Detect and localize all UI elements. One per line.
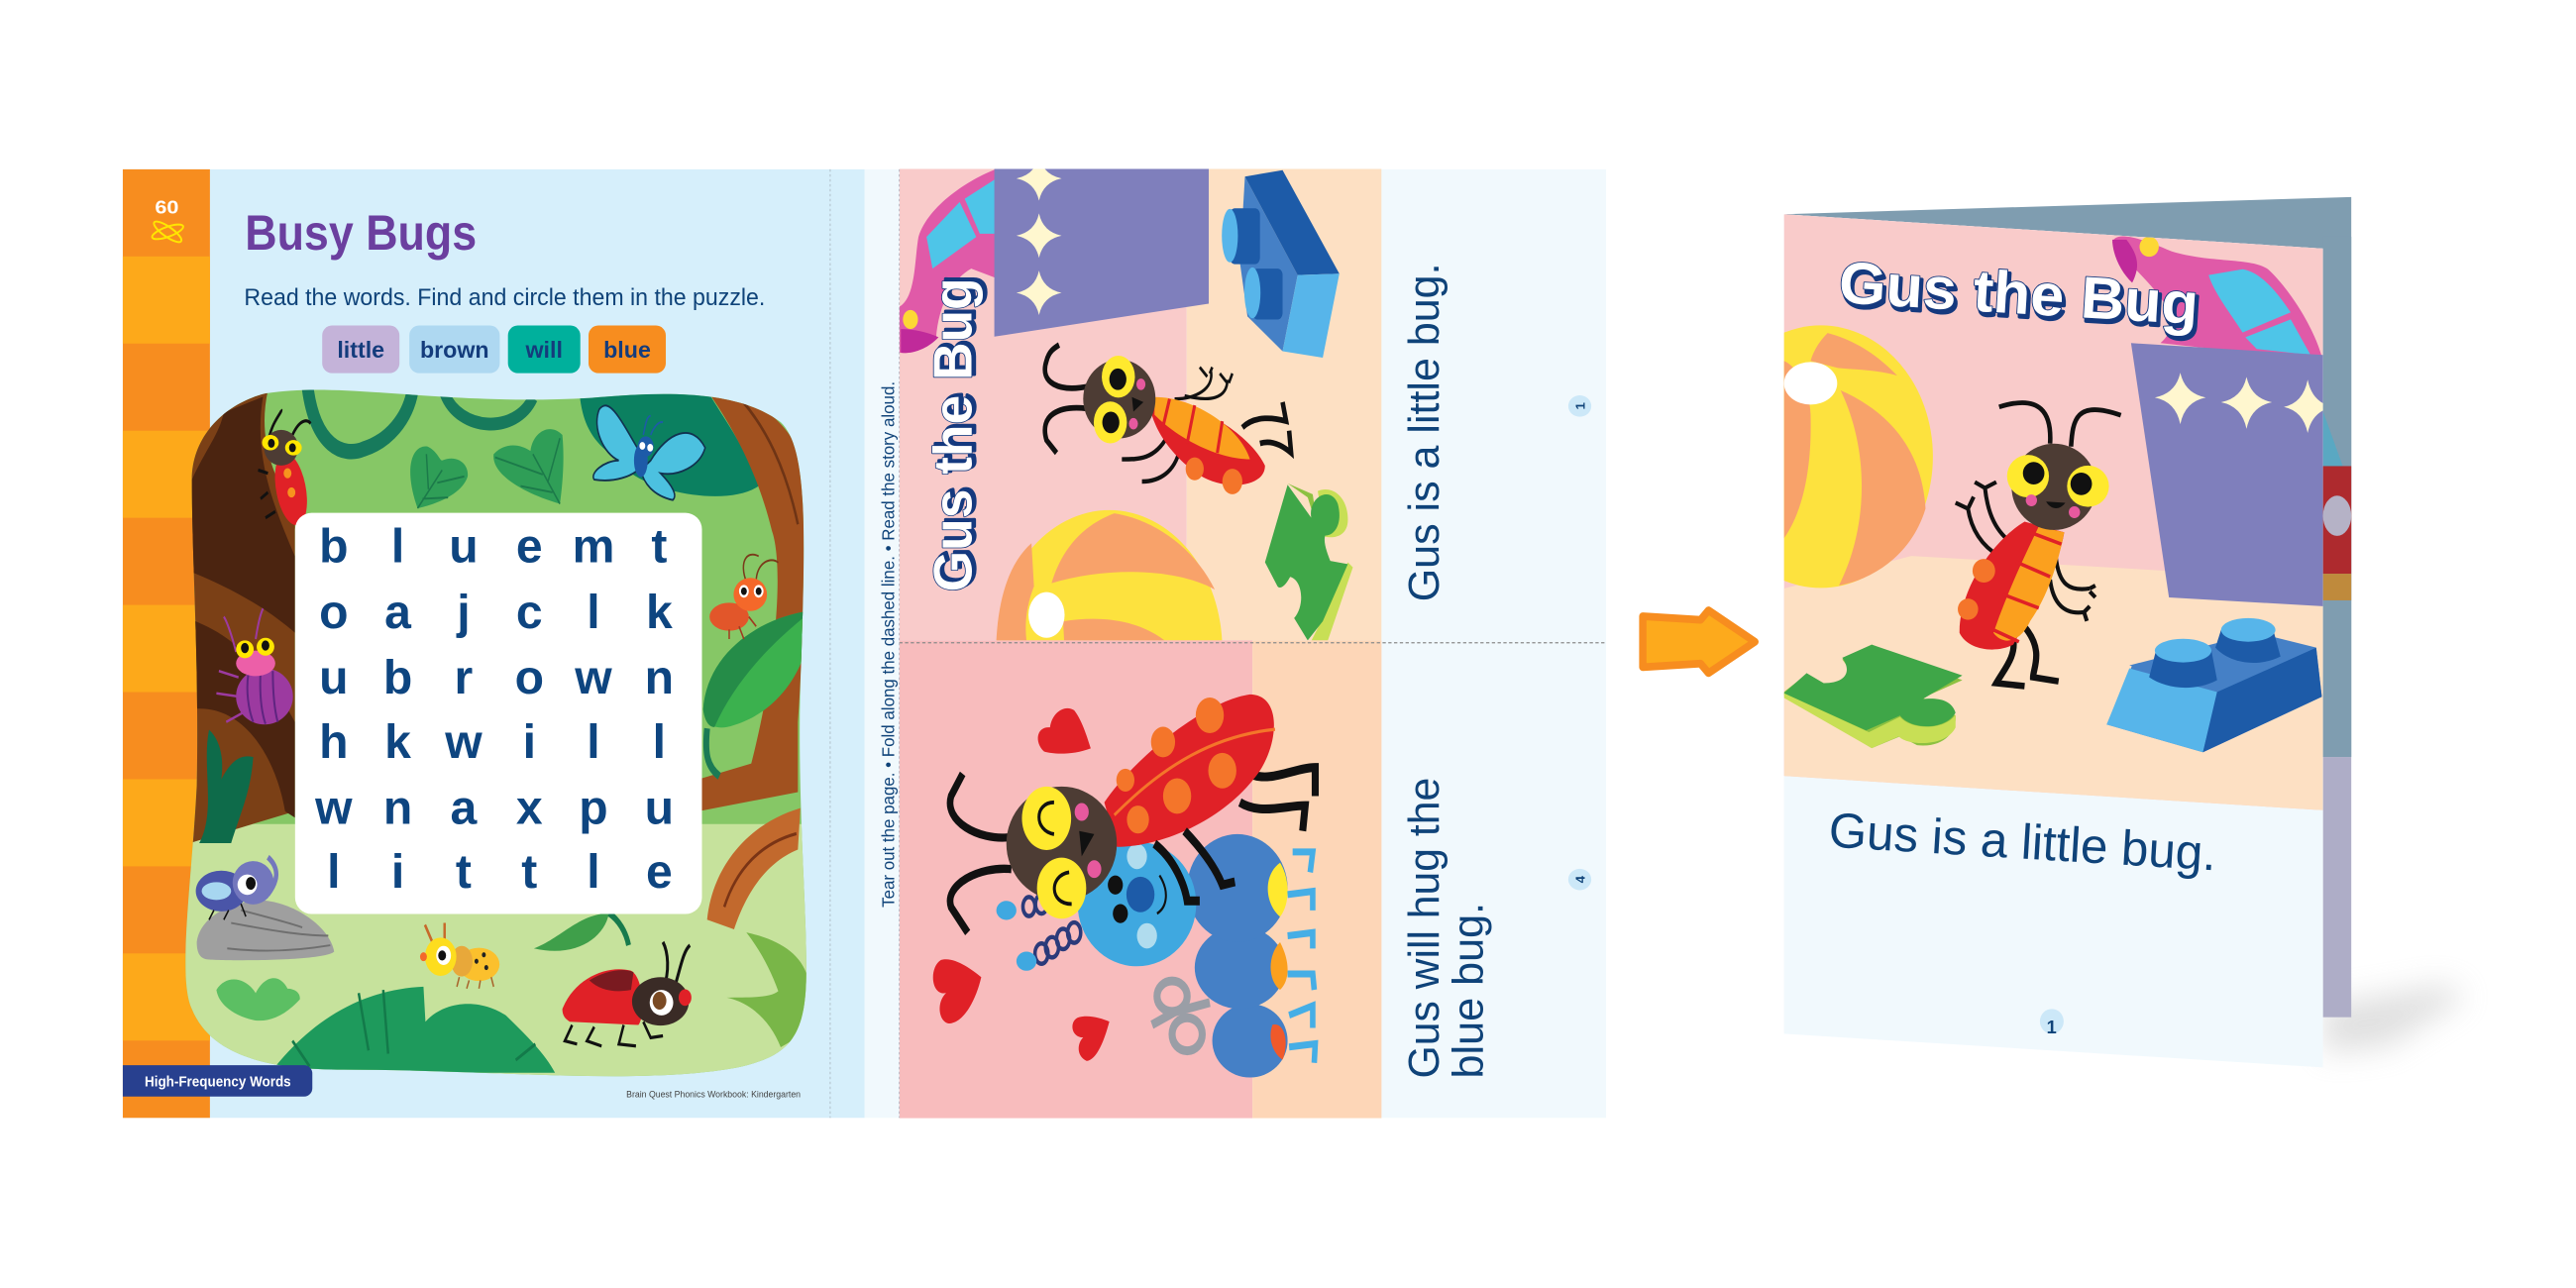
root	[707, 808, 801, 929]
footer credit: Brain Quest Phonics Workbook: Kindergarten	[626, 1090, 801, 1100]
word search grid: w	[314, 781, 353, 834]
front page	[1784, 214, 2323, 1067]
dark canopy patch	[580, 390, 759, 496]
word search grid: w	[574, 651, 612, 704]
word search grid: x	[516, 781, 543, 834]
arrow	[1643, 610, 1755, 673]
toy car	[2112, 236, 2323, 361]
word search grid: m	[573, 519, 614, 573]
story text page 4: Gus will hug the	[1400, 778, 1449, 1078]
back cover	[1784, 197, 2351, 1018]
Gus standing	[1045, 345, 1089, 453]
word search grid: l	[587, 845, 600, 899]
big right leaf	[703, 610, 812, 727]
bottom leaf	[270, 987, 555, 1073]
word search grid: u	[449, 519, 479, 573]
word search grid: o	[319, 586, 349, 639]
beach ball	[1783, 325, 1933, 589]
purple toy box	[995, 168, 1209, 337]
illustrations	[900, 157, 1381, 1119]
word search grid: n	[383, 781, 412, 834]
bug: blue horned beetle	[196, 857, 276, 919]
jigsaw piece	[1784, 645, 1963, 748]
left bush	[199, 729, 254, 843]
word search grid: c	[516, 586, 543, 639]
word search grid	[295, 513, 701, 914]
word search grid: e	[516, 519, 543, 573]
word search grid: u	[645, 781, 674, 834]
mini book cover title: Gus the Bug	[925, 275, 987, 590]
top illustration: Gus the Bug cover	[900, 168, 1381, 640]
word search grid: i	[391, 845, 404, 899]
story text page 4	[1400, 778, 1493, 1078]
word bank pills: brown	[420, 337, 489, 363]
blue toy brick	[1239, 176, 1298, 352]
mini book cover title: Gus the Bug	[922, 277, 984, 591]
rock	[197, 901, 334, 960]
instruction text: Read the words. Find and circle them in the puzzle.	[244, 284, 765, 311]
word bank pills	[322, 326, 666, 374]
booklet page number: 1	[2047, 1017, 2057, 1037]
booklet cover title: Gus the Bug	[1837, 249, 2200, 337]
bug: yellow spotted beetle	[420, 923, 499, 989]
center leaf	[534, 913, 609, 951]
bug: red ladybug	[563, 942, 692, 1046]
title: Busy Bugs: Busy Bugs	[245, 205, 477, 261]
page number badge 4	[1568, 869, 1591, 890]
orange striped spine	[123, 169, 210, 1118]
story text page 4: blue bug.	[1445, 903, 1493, 1078]
word search grid: w	[444, 715, 483, 769]
word search grid: n	[645, 651, 674, 704]
left tree trunk	[189, 390, 295, 843]
word search grid: k	[646, 586, 673, 639]
word search grid: e	[646, 845, 673, 899]
page number 60: 60	[155, 197, 178, 218]
purple toy box	[2131, 343, 2323, 606]
Gus hugging	[1239, 768, 1315, 831]
page number badge 1	[1568, 395, 1591, 417]
word search grid: h	[319, 715, 349, 769]
jigsaw piece	[1288, 483, 1314, 509]
word search grid: l	[587, 715, 600, 769]
word search grid: j	[456, 586, 471, 639]
word search grid: l	[391, 519, 404, 573]
bottom illustration: Gus hugs blue bug	[900, 640, 1381, 1119]
word search grid: t	[521, 845, 537, 899]
word search grid: b	[319, 519, 349, 573]
tab: High-Frequency Words: High-Frequency Words	[145, 1074, 291, 1091]
Gus standing	[1999, 402, 2121, 447]
word bank pills: little	[337, 337, 384, 363]
word search grid: r	[455, 651, 473, 704]
word search grid: o	[515, 651, 544, 704]
booklet cover title: Gus the Bug	[1839, 253, 2202, 341]
panel: tear-out mini book sheet	[865, 157, 1606, 1119]
word search grid: t	[456, 845, 472, 899]
word search grid: l	[327, 845, 341, 899]
word search grid: l	[653, 715, 666, 769]
bug: purple beetle	[216, 608, 293, 724]
word search grid: a	[451, 781, 479, 834]
booklet story text: Gus is a little bug.	[1827, 803, 2218, 881]
bug: red climbing bug	[259, 409, 312, 530]
word search grid: a	[384, 586, 412, 639]
toy car	[900, 168, 997, 353]
lower right leaf	[727, 932, 807, 1047]
word bank pills: blue	[603, 337, 651, 363]
word search grid: b	[383, 651, 412, 704]
blue toy brick	[2106, 648, 2321, 752]
word search grid: p	[579, 781, 608, 834]
word search grid: t	[651, 519, 667, 573]
bug: orange ant	[709, 555, 779, 639]
bug: blue butterfly	[593, 405, 705, 500]
tab: High-Frequency Words	[123, 1065, 312, 1097]
beach ball	[997, 509, 1223, 640]
word search grid: k	[384, 715, 411, 769]
page number badge 1: 1	[1572, 402, 1587, 410]
cover illustration	[1783, 214, 2322, 810]
right tree trunk	[698, 390, 804, 811]
word bank pills: will	[524, 337, 563, 363]
page number badge 4: 4	[1572, 875, 1587, 883]
wind-up key	[1152, 981, 1210, 1051]
icon: yellow star doodle	[151, 218, 185, 246]
jungle illustration	[172, 377, 820, 1079]
page number badge	[2040, 1009, 2064, 1033]
hanging vines	[307, 384, 413, 452]
story text page 1: Gus is a little bug.	[1400, 263, 1449, 601]
blue bug head	[1078, 842, 1196, 966]
panel: folded booklet	[1783, 196, 2459, 1068]
word search grid: u	[319, 651, 349, 704]
rotated instruction strip: Tear out the page. • Fold along the dashed line. • Read the story aloud.	[879, 381, 899, 908]
leaves	[410, 447, 468, 508]
word search grid: l	[587, 586, 600, 639]
panel: workbook page Busy Bugs	[123, 169, 865, 1118]
word search grid: i	[523, 715, 536, 769]
hearts	[1038, 708, 1091, 754]
blue caterpillar body	[1213, 1004, 1288, 1078]
drop shadow	[2323, 985, 2466, 1052]
small bush	[216, 978, 300, 1020]
